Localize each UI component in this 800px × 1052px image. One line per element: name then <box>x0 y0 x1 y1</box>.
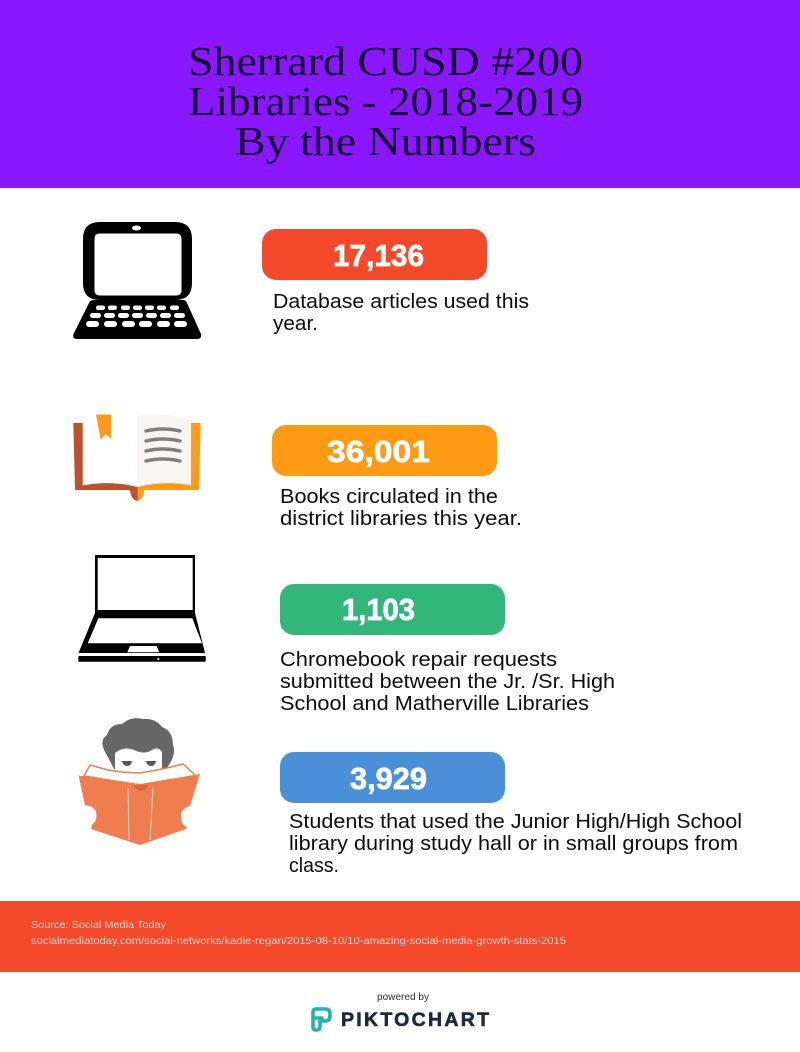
text: database articles: year. <box>273 312 318 335</box>
stat row: database articles <box>73 222 529 339</box>
icon: piktochart logo <box>313 1009 330 1030</box>
piktochart branding: powered by <box>377 991 430 1003</box>
number pill: 17,136: 17,136 <box>333 238 424 273</box>
number pill: 1,103: 1,103 <box>342 592 415 627</box>
number pill: 17,136 <box>262 229 487 280</box>
text: students: Students that used the Junior High/High School <box>289 810 742 833</box>
stat row: books circulated <box>73 414 522 530</box>
number pill: 3,929: 3,929 <box>350 761 427 796</box>
number pill: 3,929 <box>280 752 505 803</box>
stat row: chromebook repairs <box>78 555 615 715</box>
source footer: Source: Social Media Today <box>31 919 167 931</box>
text: books circulated <box>280 485 522 530</box>
text: books circulated: Books circulated in the <box>280 485 498 508</box>
title: By the Numbers <box>235 118 536 164</box>
text: students <box>289 810 742 877</box>
title: Sherrard CUSD #200 <box>188 38 583 84</box>
text: chromebook repairs: School and Matherville Libraries <box>280 692 589 715</box>
piktochart branding <box>313 991 489 1031</box>
source footer: socialmediatoday.com/social-networks/kadie-regan/2015-08-10/10-amazing-social-media-growth-stats-2015 <box>31 935 566 947</box>
text: students: library during study hall or in small groups from <box>289 832 738 855</box>
icon: laptop <box>78 555 206 662</box>
number pill: 1,103 <box>280 584 505 635</box>
icon: netbook <box>73 222 201 339</box>
piktochart branding: PIKTOCHART <box>341 1009 489 1031</box>
text: database articles <box>273 290 529 335</box>
number pill: 36,001: 36,001 <box>327 434 430 469</box>
stat row: students <box>78 718 742 877</box>
text: chromebook repairs: submitted between the Jr. /Sr. High <box>280 670 615 693</box>
title: Libraries - 2018-2019 <box>188 78 583 124</box>
title <box>188 38 583 164</box>
text: chromebook repairs <box>280 648 615 715</box>
text: chromebook repairs: Chromebook repair requests <box>280 648 557 671</box>
text: books circulated: district libraries this year. <box>280 507 522 530</box>
source footer <box>0 901 800 972</box>
text: database articles: Database articles used this <box>273 290 529 313</box>
number pill: 36,001 <box>272 425 497 476</box>
icon: student reading <box>78 718 200 845</box>
text: students: class. <box>289 854 339 877</box>
icon: open book <box>73 414 201 501</box>
header panel <box>0 0 800 188</box>
